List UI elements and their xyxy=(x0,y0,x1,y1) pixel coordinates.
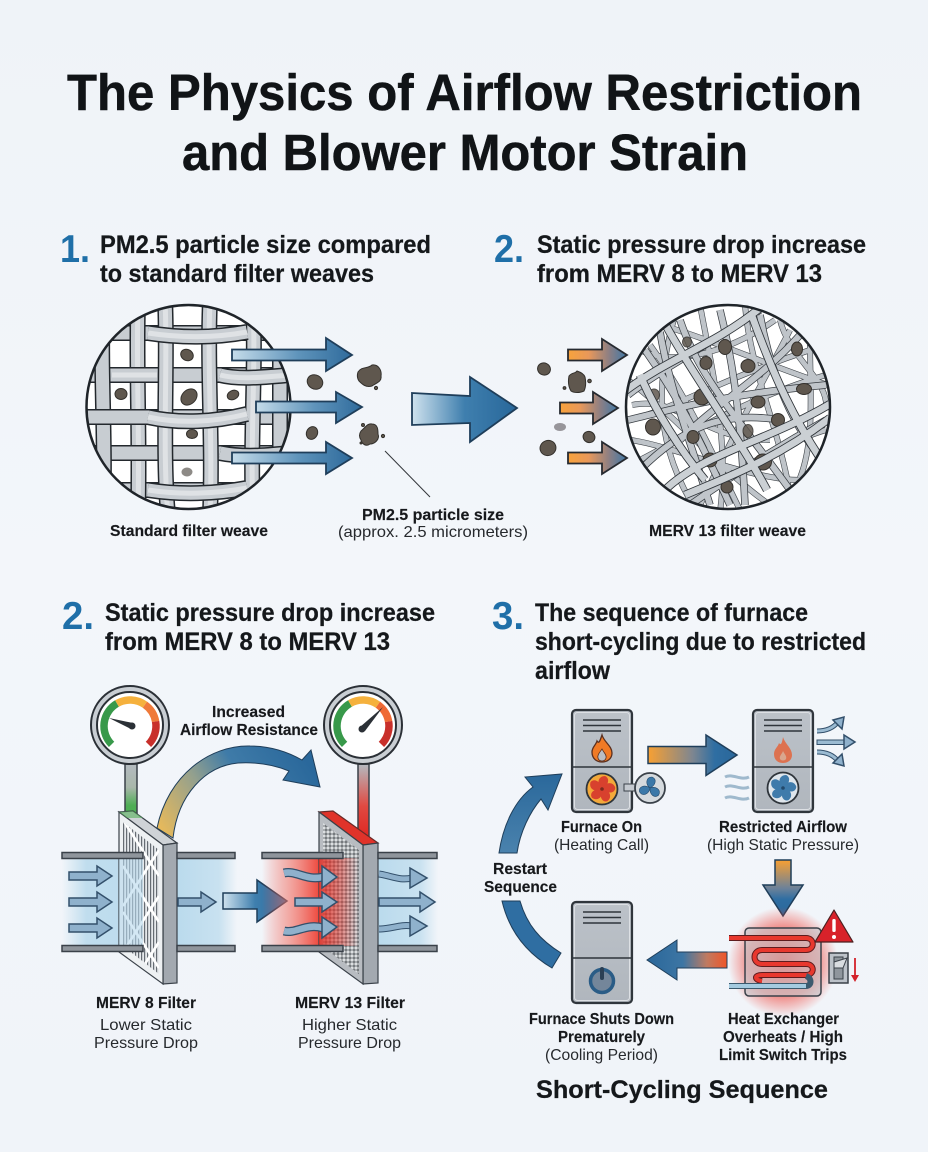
heading: section 3 xyxy=(492,595,866,685)
icon: escaping air xyxy=(817,717,855,766)
MERV 8 filter frame xyxy=(119,811,177,998)
heading: section 2 upper xyxy=(494,228,866,288)
airflow arrows: MERV 13 xyxy=(560,339,627,474)
pressure gauge stem xyxy=(125,764,137,816)
labels: cycle steps: Furnace Shuts Down xyxy=(529,1011,674,1028)
label: increased airflow resistance: Airflow Resistance xyxy=(180,722,318,739)
labels: weave captions: MERV 13 filter weave xyxy=(649,523,806,540)
labels: cycle steps: Overheats / High xyxy=(723,1029,843,1046)
icon: power button xyxy=(590,967,614,992)
labels: MERV filters: Pressure Drop xyxy=(298,1035,401,1052)
standard filter weave circle xyxy=(80,300,300,515)
heading: section 2 lower: 2. xyxy=(62,595,94,638)
furnace 2: restricted xyxy=(725,710,855,812)
duct rails xyxy=(62,852,235,952)
labels: MERV filters: Pressure Drop xyxy=(94,1035,198,1052)
air arrows: outflow xyxy=(379,868,435,936)
MERV 13 filter weave circle xyxy=(624,305,830,512)
arrow: restricted to heat exchanger xyxy=(763,860,803,916)
heading: section 3: The sequence of furnace xyxy=(535,599,808,627)
labels: cycle steps: (High Static Pressure) xyxy=(707,837,859,854)
labels: cycle steps: Restricted Airflow xyxy=(719,819,848,836)
heading: section 2 upper: from MERV 8 to MERV 13 xyxy=(537,260,822,288)
duct pressure glow xyxy=(262,858,438,946)
cycle arrows: restart xyxy=(499,774,562,968)
heading: section 3: 3. xyxy=(492,595,524,638)
labels: MERV filters: Lower Static xyxy=(100,1017,192,1034)
icon: blue fan xyxy=(768,772,798,804)
heat exchanger xyxy=(728,907,859,1017)
title: and Blower Motor Strain xyxy=(182,124,748,181)
heading: section 1 PM2.5: PM2.5 particle size compared xyxy=(100,231,431,259)
panel: MERV 8 duct and filter xyxy=(62,686,237,998)
approaching particles xyxy=(536,361,597,458)
labels: weave captions: Standard filter weave xyxy=(110,523,268,540)
labels: MERV filters: MERV 8 Filter xyxy=(96,995,196,1012)
arrow: furnace on to restricted xyxy=(648,735,737,776)
labels: weave captions: PM2.5 particle size xyxy=(362,507,504,524)
labels: weave captions: (approx. 2.5 micrometers) xyxy=(338,524,528,541)
icon: blower fan xyxy=(624,773,665,803)
labels: cycle steps: (Cooling Period) xyxy=(545,1047,658,1064)
labels: cycle steps: (Heating Call) xyxy=(554,837,649,854)
icon: warning triangle xyxy=(815,910,853,942)
heading: section 2 lower xyxy=(62,595,435,656)
pressure gauge: low xyxy=(91,686,169,764)
pressure gauge: high xyxy=(324,686,402,764)
labels: MERV filters: Higher Static xyxy=(302,1017,397,1034)
leader line xyxy=(385,451,430,497)
heading: section 1 PM2.5: 1. xyxy=(60,228,90,271)
icon: hot fan xyxy=(586,774,618,804)
heading: section 2 lower: from MERV 8 to MERV 13 xyxy=(105,628,390,656)
trapped particles xyxy=(115,347,240,476)
air arrows: MERV 8 xyxy=(69,866,216,938)
labels: MERV filters: MERV 13 Filter xyxy=(295,995,405,1012)
icon: wavy restricted air xyxy=(725,776,749,799)
curved arrow: increased resistance xyxy=(157,746,320,838)
heading: section 1 PM2.5: to standard filter weaves xyxy=(100,260,374,288)
duct rails xyxy=(262,852,437,952)
duct airflow glow xyxy=(62,858,237,946)
labels: cycle steps: Restart xyxy=(493,861,548,878)
icon: weak flame xyxy=(774,737,792,763)
heading: section 3: short-cycling due to restricted xyxy=(535,628,866,656)
icon: high limit switch xyxy=(829,953,859,983)
heading: section 2 upper: Static pressure drop increase xyxy=(537,231,866,259)
pressure gauge stem high xyxy=(358,764,369,840)
labels: cycle steps xyxy=(484,819,859,1064)
center transition arrow xyxy=(412,377,517,442)
heading: section 2 upper: 2. xyxy=(494,228,524,271)
arrow: exchanger to shutdown xyxy=(647,940,727,980)
labels: MERV filters xyxy=(94,995,405,1052)
labels: cycle steps: Prematurely xyxy=(558,1029,645,1046)
heading: section 1 PM2.5 xyxy=(60,228,431,288)
trapped fine particles xyxy=(646,337,812,493)
overheating glow xyxy=(728,907,838,1017)
air arrows: restricted inflow xyxy=(284,866,337,938)
furnace 1: on xyxy=(572,710,665,812)
caption: short-cycling sequence: Short-Cycling Sequence xyxy=(536,1076,828,1104)
labels: cycle steps: Heat Exchanger xyxy=(728,1011,839,1028)
heading: section 3: airflow xyxy=(535,657,611,685)
labels: cycle steps: Sequence xyxy=(484,879,557,896)
airflow arrows: standard weave xyxy=(232,338,362,474)
panel: MERV 13 duct and filter xyxy=(262,686,438,984)
labels: weave captions xyxy=(110,507,806,541)
label: increased airflow resistance: Increased xyxy=(212,704,285,721)
title: The Physics of Airflow Restriction xyxy=(67,64,862,121)
coil xyxy=(729,938,813,986)
MERV 13 filter frame xyxy=(319,811,378,984)
title xyxy=(67,64,862,181)
arrow: MERV 8 to MERV 13 xyxy=(223,880,287,922)
labels: cycle steps: Furnace On xyxy=(561,819,642,836)
furnace 3: shut down xyxy=(572,902,632,1003)
label: increased airflow resistance xyxy=(180,704,318,739)
icon: flame xyxy=(592,735,612,762)
free PM2.5 particles xyxy=(304,365,385,445)
heading: section 2 lower: Static pressure drop increase xyxy=(105,599,435,627)
labels: cycle steps: Limit Switch Trips xyxy=(719,1047,847,1064)
